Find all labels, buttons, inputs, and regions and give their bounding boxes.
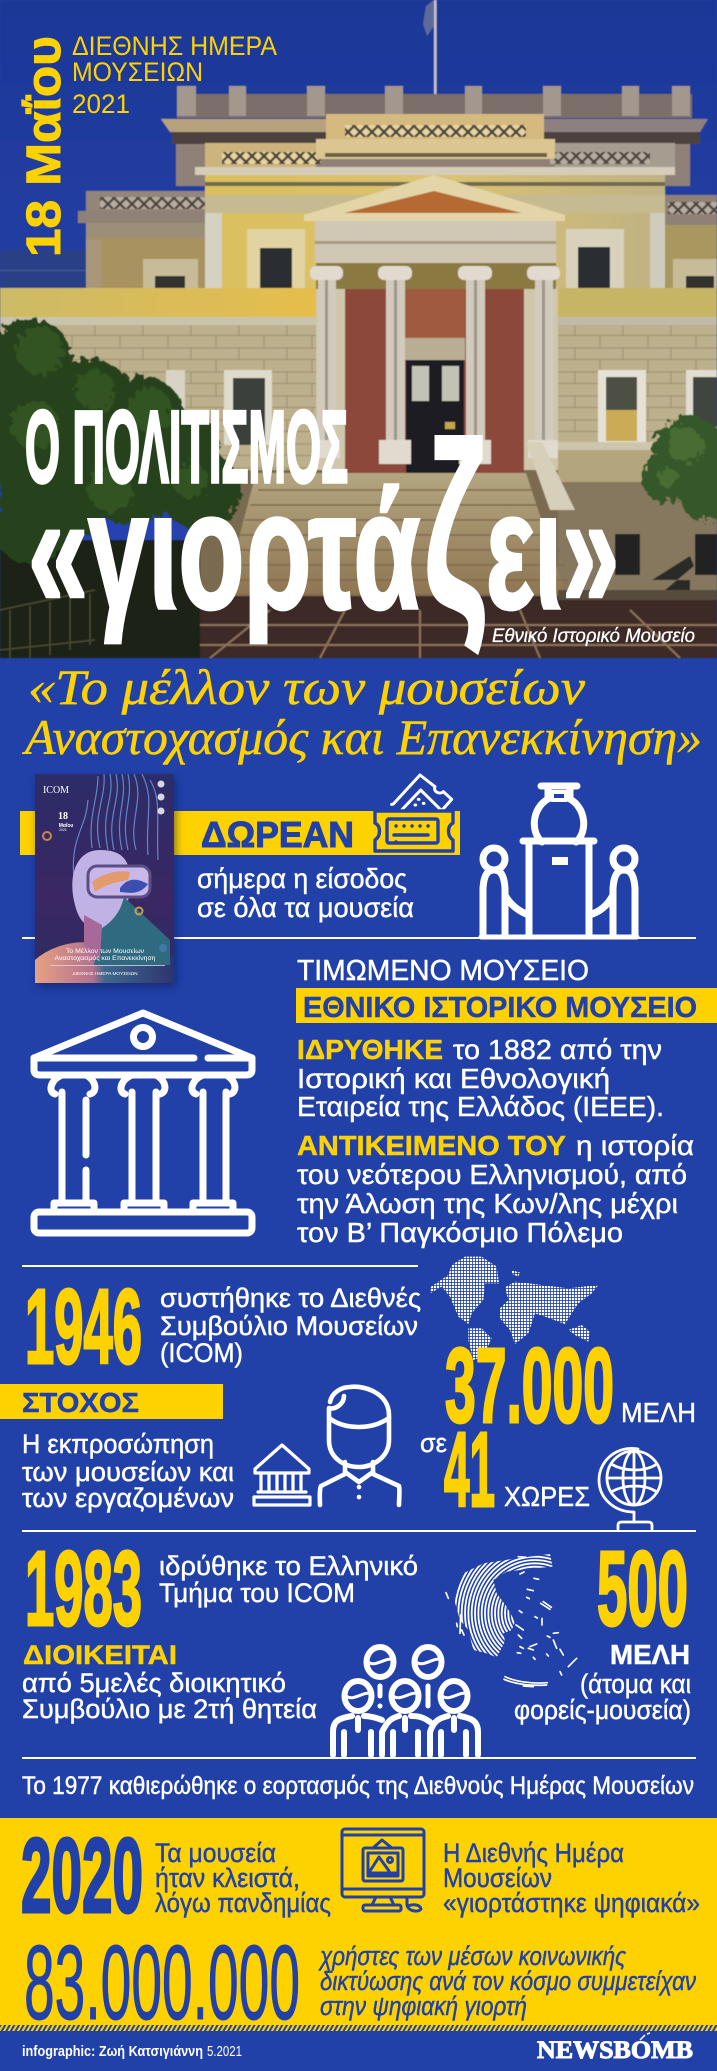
- poster: ICOM 2021: ICOM: [43, 785, 69, 796]
- icon: globe: [599, 1448, 661, 1529]
- stat: 37.000 members: ΜΕΛΗ: [621, 1397, 696, 1428]
- poster: ICOM 2021: Αναστοχασμός και Επανεκκίνηση: [54, 954, 156, 962]
- divider line: [22, 1530, 696, 1532]
- poster: ICOM 2021: ΔΙΕΘΝΗΣ ΗΜΕΡΑ ΜΟΥΣΕΙΩΝ: [72, 971, 138, 977]
- theme heading: [22, 659, 702, 765]
- text: museums closed: Τα μουσεία: [155, 1838, 276, 1868]
- event name: ΜΟΥΣΕΙΩΝ: [72, 57, 203, 87]
- poster: ICOM 2021: 18: [58, 811, 68, 822]
- text: social media users: χρήστες των μέσων κοινωνικής: [318, 1941, 626, 1971]
- stat: 1983 Greek section: [25, 1530, 418, 1648]
- stat: 1946 ICOM: [25, 1268, 421, 1386]
- divider line: [22, 1265, 418, 1267]
- divider line: [22, 937, 696, 939]
- text: social media users: [318, 1941, 696, 2021]
- text: founded: Ιστορική και Εθνολογική: [297, 1063, 610, 1094]
- stat: 500 members: φορείς-μουσεία): [514, 1695, 691, 1725]
- poster: ICOM 2021: 2021: [59, 828, 67, 832]
- free entry text: σε όλα τα μουσεία: [197, 892, 414, 923]
- text: goal description: Η εκπροσώπηση: [22, 1429, 214, 1459]
- poster: ICOM 2021: [35, 774, 176, 987]
- text: governance: Συμβούλιο με 2τή θητεία: [22, 1694, 317, 1724]
- map: Greece: [445, 1554, 578, 1688]
- footer credit: infographic: Ζωή Κατσιγιάννη: [22, 2044, 203, 2060]
- main title: «γιορτά: [28, 458, 420, 644]
- text: founded: ΙΔΡΥΘΗΚΕ: [297, 1034, 443, 1065]
- panel: 2020 digital celebration: [0, 1817, 717, 2042]
- text: governance: ΔΙΟΙΚΕΙΤΑΙ: [23, 1640, 177, 1670]
- icon: monitor with picture: [342, 1829, 424, 1911]
- text: subject: του νεότερου Ελληνισμού, από: [297, 1159, 687, 1190]
- theme heading: Αναστοχασμός και Επανεκκίνηση»: [22, 709, 702, 765]
- stat: 41 countries: [420, 1411, 590, 1529]
- vertical date: 18 Μαΐου: [18, 36, 71, 257]
- theme heading: «Το μέλλον των μουσείων: [28, 659, 586, 715]
- stat: 1983 Greek section: ιδρύθηκε το Ελληνικό: [159, 1551, 418, 1581]
- stat: 1946 ICOM: Συμβούλιο Μουσείων: [160, 1311, 418, 1341]
- photo caption: Εθνικό Ιστορικό Μουσείο: [492, 626, 695, 647]
- text: governance: από 5μελές διοικητικό: [22, 1668, 286, 1698]
- text: subject: η ιστορία: [576, 1130, 694, 1161]
- text: museums closed: [155, 1838, 331, 1918]
- text: goal description: [22, 1429, 234, 1513]
- heading: honoured museum: ΤΙΜΩΜΕΝΟ ΜΟΥΣΕΙΟ: [297, 955, 589, 987]
- header: date and event: [18, 31, 277, 257]
- event name: [72, 31, 277, 119]
- stat: 1946 ICOM: συστήθηκε το Διεθνές: [160, 1283, 421, 1313]
- event name: 2021: [72, 89, 130, 119]
- text: subject: ΑΝΤΙΚΕΙΜΕΝΟ ΤΟΥ: [297, 1130, 566, 1161]
- stat: 1983 Greek section: 1983: [25, 1530, 142, 1648]
- text: subject: [297, 1130, 694, 1248]
- icon: small museum: [254, 1445, 310, 1505]
- stat: 1946 ICOM: (ICOM): [160, 1338, 243, 1368]
- hatched edge: [0, 2025, 717, 2031]
- divider line: [22, 1757, 696, 1759]
- logo: Newsbomb: NEWSBOMB: [537, 2037, 693, 2064]
- stat: 1946 ICOM: 1946: [25, 1268, 142, 1386]
- main title: [25, 390, 619, 657]
- map: world dots: [430, 1257, 598, 1360]
- text: social media users: στην ψηφιακή γιορτή: [320, 1991, 527, 2021]
- text: celebrated digitally: Μουσείων: [443, 1863, 552, 1893]
- photo: Εθνικό Ιστορικό Μουσείο building: [0, 0, 717, 658]
- main title: ζ: [424, 394, 486, 657]
- poster: ICOM 2021: Το Μέλλον των Μουσείων: [66, 947, 145, 955]
- yellow bar: goal: [0, 1384, 223, 1419]
- free entry label: ΔΩΡΕΑΝ: [201, 814, 354, 855]
- stat: 41 countries: 41: [444, 1411, 495, 1529]
- main title: ει»: [486, 458, 619, 644]
- yellow bar: goal: ΣΤΟΧΟΣ: [22, 1387, 139, 1418]
- text: governance: [22, 1640, 317, 1724]
- stat: 500 members: ΜΕΛΗ: [610, 1639, 690, 1670]
- free entry band: [20, 811, 460, 855]
- text: goal description: των μουσείων και: [22, 1457, 234, 1487]
- event name: ΔΙΕΘΝΗΣ ΗΜΕΡΑ: [72, 31, 277, 61]
- text: founded: Εταιρεία της Ελλάδος (ΙΕΕΕ).: [297, 1091, 664, 1122]
- text: museums closed: ήταν κλειστά,: [155, 1863, 300, 1893]
- free entry text: [197, 863, 414, 923]
- text: museums closed: λόγω πανδημίας: [155, 1888, 331, 1918]
- stat: 83.000.000: 83.000.000: [24, 1924, 300, 2042]
- text: goal description: των εργαζομένων: [22, 1483, 234, 1513]
- stat: 1983 Greek section: Τμήμα του ICOM: [159, 1578, 355, 1608]
- stat: 2020: 2020: [21, 1817, 143, 1935]
- text: subject: την Άλωση της Κων/λης μέχρι: [297, 1188, 678, 1219]
- stat: 41 countries: σε: [420, 1428, 447, 1458]
- text: founded: [297, 1034, 664, 1122]
- text: founded: το 1882 από την: [453, 1034, 662, 1065]
- icon: tickets: [375, 775, 453, 851]
- icon: board members: [333, 1647, 478, 1755]
- icon: vase on pedestal: [481, 786, 637, 937]
- text: subject: τον Β’ Παγκόσμιο Πόλεμο: [297, 1217, 623, 1248]
- footer credit: 5.2021: [207, 2044, 242, 2060]
- yellow bar: national historical museum: ΕΘΝΙΚΟ ΙΣΤΟΡΙΚΟ ΜΟΥΣΕΙΟ: [303, 992, 697, 1024]
- stat: 500 members: [514, 1530, 691, 1725]
- text: celebrated digitally: [443, 1838, 700, 1918]
- text: celebrated digitally: Η Διεθνής Ημέρα: [443, 1838, 624, 1868]
- stat: 500 members: (άτομα και: [580, 1669, 691, 1699]
- stat: 41 countries: ΧΩΡΕΣ: [504, 1481, 590, 1512]
- icon: white ticket: [392, 775, 452, 811]
- poster: ICOM 2021: Μαΐου: [59, 823, 73, 829]
- icon: temple: [34, 1013, 252, 1233]
- icon: blue ticket: [375, 811, 453, 851]
- free entry text: σήμερα η είσοδος: [197, 863, 407, 894]
- icon: person: [320, 1387, 399, 1505]
